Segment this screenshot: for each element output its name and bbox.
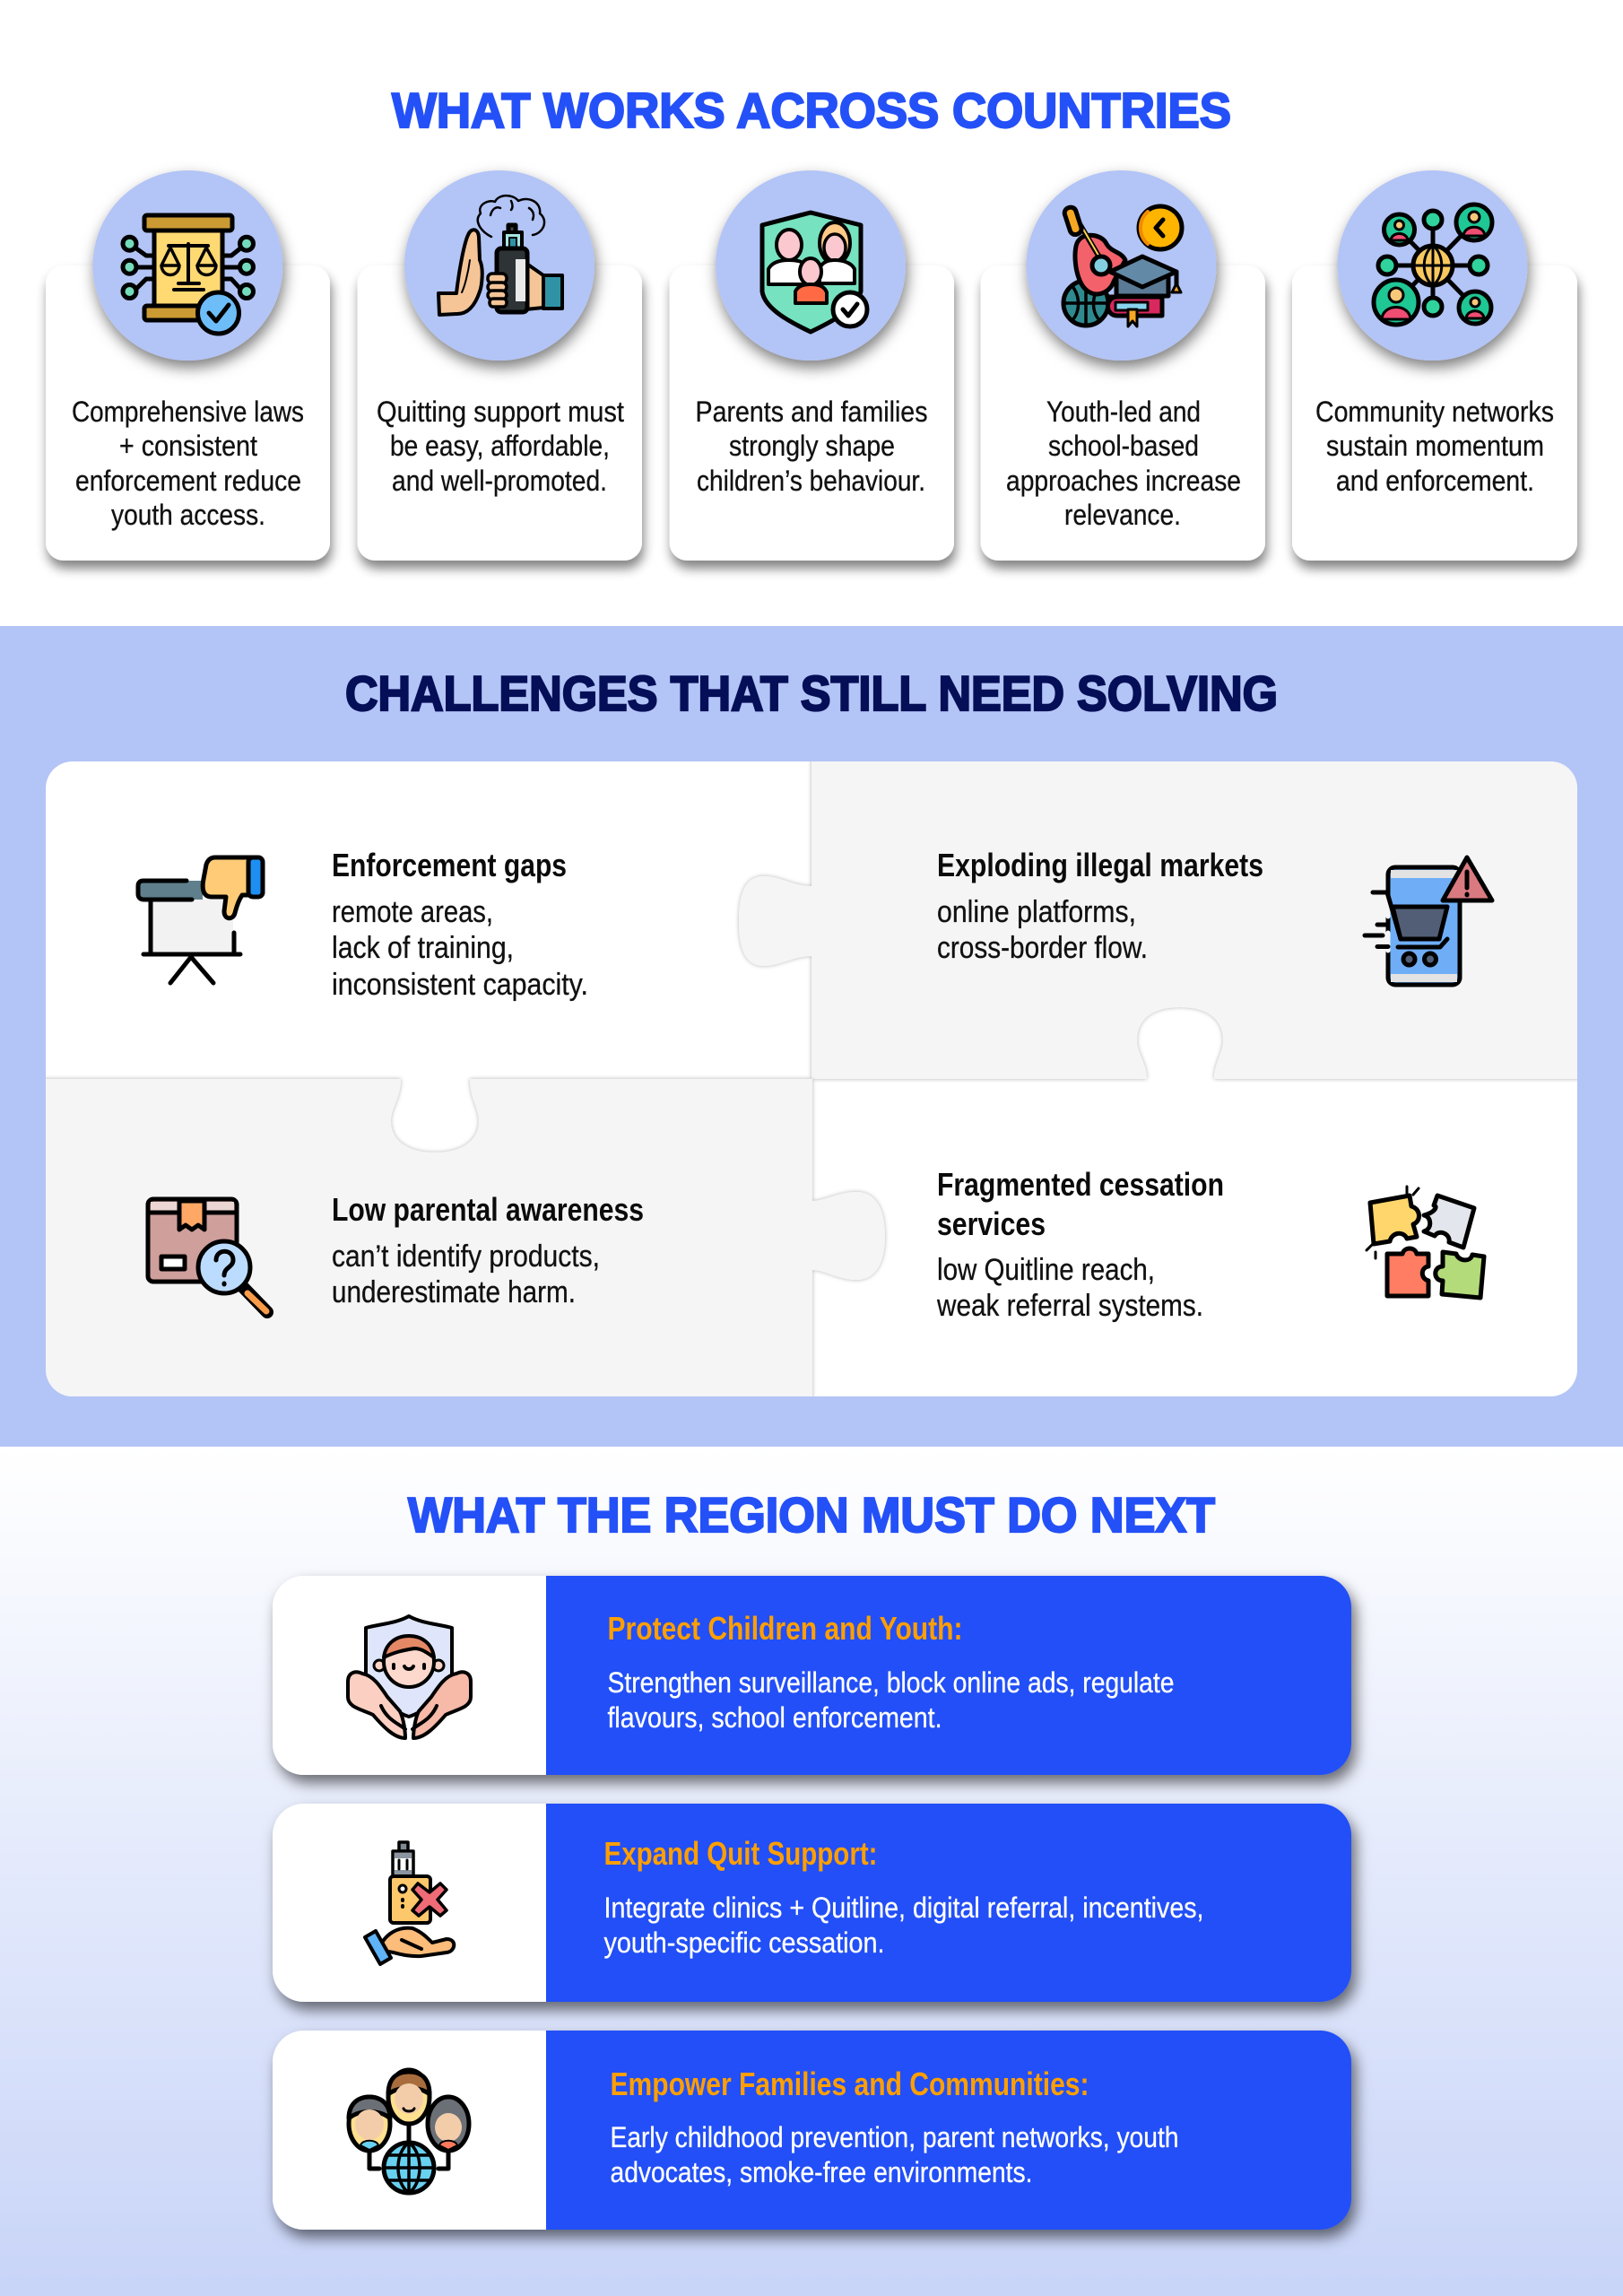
card text: quitting support: Quitting support must [377, 396, 624, 428]
action bar 3: empower families [273, 2031, 1351, 2230]
icon: box and magnifier [148, 1199, 267, 1312]
card text: youth-led: relevance. [1064, 499, 1181, 531]
text: empower families [610, 2066, 1178, 2188]
card text: parents [696, 396, 927, 497]
text: enforcement gaps [332, 847, 588, 1002]
text: illegal markets: Exploding illegal markets [937, 847, 1263, 883]
heading: region next: WHAT THE REGION MUST DO NEXT [408, 1487, 1215, 1543]
text: expand quit support [604, 1835, 1203, 1959]
heading: challenges: CHALLENGES THAT STILL NEED SOLVING [345, 665, 1278, 721]
text: expand quit support: Integrate clinics + Quitline, digital referral, incentives, [604, 1892, 1203, 1924]
card text: laws: youth access. [111, 499, 265, 531]
text: empower families: Empower Families and Communities: [610, 2066, 1089, 2102]
action bar 2: expand quit support [273, 1804, 1351, 2002]
challenge: enforcement gaps [138, 847, 588, 1002]
text: protect children [608, 1610, 1175, 1734]
icon: family shield [762, 213, 867, 332]
card text: quitting support: and well-promoted. [392, 465, 607, 497]
challenge: low parental awareness [148, 1191, 644, 1312]
text: expand quit support: Expand Quit Support: [604, 1835, 877, 1872]
text: cessation services: services [937, 1205, 1046, 1242]
text: parental awareness: can’t identify products, [332, 1239, 600, 1274]
text: illegal markets: online platforms, [937, 895, 1136, 929]
card text: community [1315, 396, 1554, 497]
icon: three faces and globe [349, 2070, 469, 2193]
icon: board with thumbs down [138, 857, 263, 983]
text: cessation services: weak referral systems. [936, 1289, 1203, 1323]
card text: parents: children’s behaviour. [697, 465, 925, 497]
card text: laws: Comprehensive laws [72, 396, 304, 428]
card text: laws: enforcement reduce [75, 465, 301, 497]
card text: community: sustain momentum [1326, 430, 1544, 462]
challenge: fragmented cessation services [936, 1166, 1484, 1323]
puzzle piece: bottom left [36, 1079, 885, 1408]
icon: child in shield and hands [348, 1616, 471, 1738]
text: cessation services: low Quitline reach, [937, 1253, 1155, 1287]
puzzle piece: top right [739, 753, 1587, 1079]
card text: quitting support: be easy, affordable, [390, 430, 610, 462]
text: parental awareness: Low parental awareness [332, 1191, 644, 1228]
card 3: parents and families [669, 170, 954, 561]
text: enforcement gaps: inconsistent capacity. [332, 968, 588, 1002]
card text: community: and enforcement. [1336, 465, 1534, 497]
heading: what works: WHAT WORKS ACROSS COUNTRIES [392, 83, 1231, 138]
puzzle board [36, 753, 1587, 1408]
icon: hand refusing vape [438, 196, 562, 315]
icon: guitar, cap, clock, ball and books [1063, 206, 1182, 326]
panel: what the region must do next [0, 1447, 1623, 2296]
panel: challenges that still need solving [0, 626, 1623, 1447]
text: empower families: Early childhood prevention, parent networks, youth [610, 2121, 1178, 2153]
icon: scattered puzzle pieces [1367, 1187, 1484, 1298]
text: parental awareness [332, 1191, 644, 1309]
icon: law scroll [123, 215, 253, 334]
challenge: exploding illegal markets [937, 847, 1492, 985]
text: protect children: flavours, school enforcement. [608, 1701, 942, 1734]
text: illegal markets [937, 847, 1263, 965]
text: enforcement gaps: Enforcement gaps [332, 847, 567, 883]
text: protect children: Strengthen surveillance, block online ads, regulate [608, 1666, 1175, 1699]
text: empower families: advocates, smoke-free environments. [610, 2156, 1033, 2188]
card text: youth-led [1006, 396, 1241, 531]
card text: quitting support [377, 396, 624, 497]
card text: community: Community networks [1315, 396, 1554, 428]
card 1: laws [46, 170, 330, 561]
card 5: community networks [1292, 170, 1577, 561]
text: cessation services [936, 1166, 1224, 1323]
panel: what works across countries [46, 83, 1577, 561]
card text: youth-led: school-based [1048, 430, 1199, 462]
text: parental awareness: underestimate harm. [332, 1275, 576, 1309]
action bar 1: protect children [273, 1576, 1351, 1775]
card text: laws: + consistent [119, 430, 257, 462]
card text: parents: Parents and families [696, 396, 927, 428]
icon: community network [1374, 204, 1492, 325]
card text: youth-led: approaches increase [1006, 465, 1241, 497]
text: enforcement gaps: remote areas, [332, 895, 493, 929]
text: protect children: Protect Children and Youth: [608, 1610, 963, 1647]
text: enforcement gaps: lack of training, [332, 931, 514, 965]
card text: laws [72, 396, 304, 531]
text: illegal markets: cross-border flow. [937, 931, 1148, 965]
text: expand quit support: youth-specific cessation. [604, 1926, 884, 1959]
icon: phone, cart and warning [1365, 857, 1492, 985]
card 2: quitting support [357, 170, 642, 561]
text: cessation services: Fragmented cessation [937, 1166, 1224, 1203]
card 4: youth-led [981, 170, 1265, 561]
card text: parents: strongly shape [729, 430, 895, 462]
card text: youth-led: Youth-led and [1046, 396, 1201, 428]
icon: vape with cross over hand [365, 1842, 454, 1964]
